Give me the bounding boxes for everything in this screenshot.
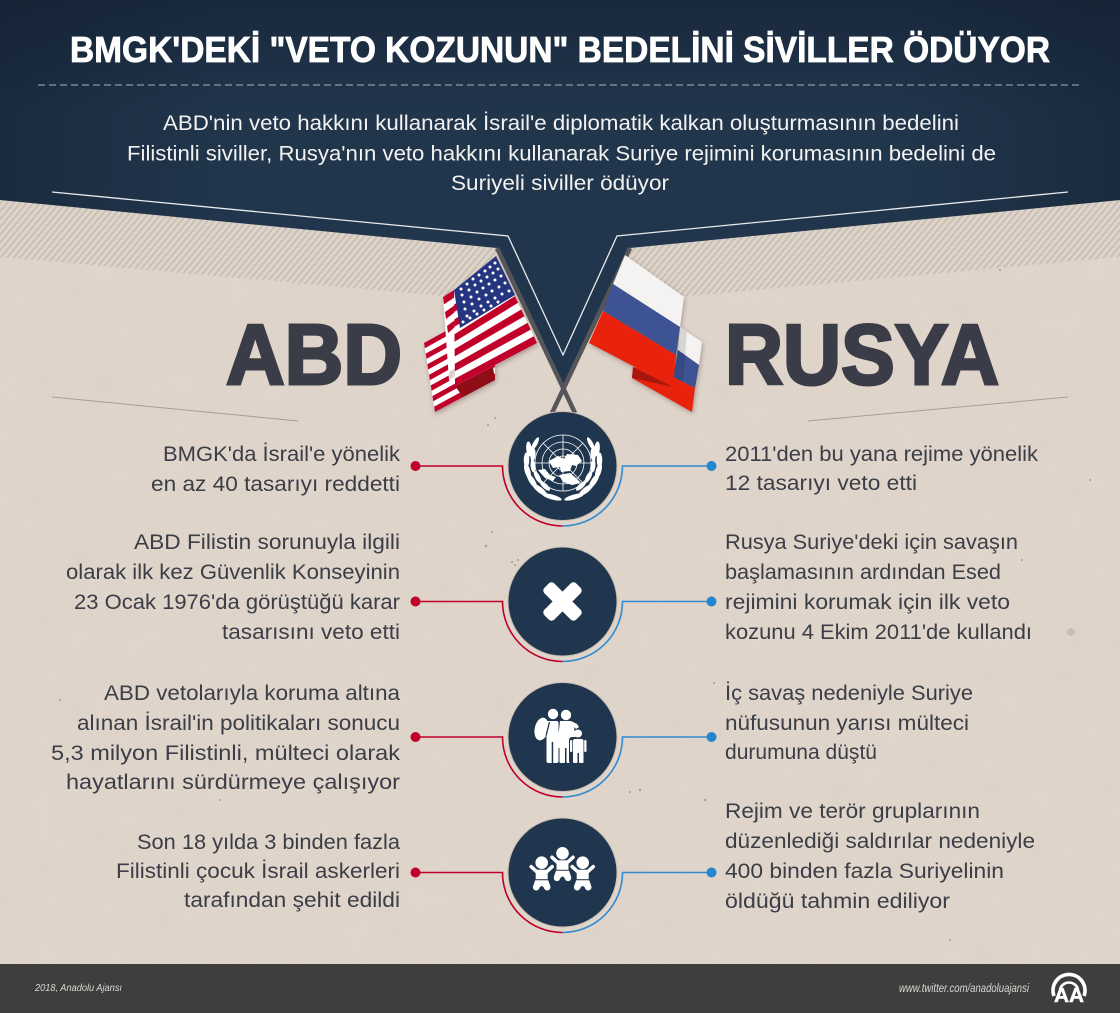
rear flag panel	[632, 327, 702, 412]
left text: Filistinli çocuk İsrail askerleri	[116, 859, 400, 883]
left text	[51, 681, 400, 794]
flag poles	[497, 248, 630, 413]
rear flag panel	[424, 304, 495, 412]
left text	[116, 830, 400, 912]
hatched band under header	[0, 200, 1120, 300]
left text: 5,3 milyon Filistinli, mülteci olarak	[51, 741, 400, 765]
row 1	[151, 412, 1038, 526]
copyright: 2018, Anadolu Ajansı	[34, 982, 122, 994]
icon: X mark	[542, 581, 583, 622]
right text: nüfusunun yarısı mülteci	[725, 711, 969, 735]
circle	[508, 818, 617, 927]
subtitle	[127, 111, 996, 195]
right text: 12 tasarıyı veto etti	[725, 471, 917, 495]
subtitle: Suriyeli siviller ödüyor	[451, 171, 669, 195]
left text: Son 18 yılda 3 binden fazla	[137, 830, 400, 854]
row 2	[66, 530, 1032, 662]
right text: rejimini korumak için ilk veto	[725, 590, 1010, 614]
logo: AA: AA	[1054, 985, 1084, 1007]
front flag	[454, 256, 537, 386]
subtitle: ABD'nin veto hakkını kullanarak İsrail'e diplomatik kalkan oluşturmasının bedelini	[163, 111, 959, 135]
right text	[725, 799, 1035, 913]
title: BMGK'DEKİ "VETO KOZUNUN" BEDELİNİ SİVİLLER ÖDÜYOR	[70, 29, 1050, 70]
right text: 400 binden fazla Suriyelinin	[725, 859, 1004, 883]
right text: kozunu 4 Ekim 2011'de kullandı	[725, 620, 1032, 644]
heading: ABD: ABD	[226, 308, 402, 403]
flag: Russia	[589, 255, 702, 412]
left text: en az 40 tasarıyı reddetti	[151, 472, 400, 496]
connector	[410, 596, 716, 662]
left text: hayatlarını sürdürmeye çalışıyor	[66, 770, 400, 794]
dashed divider	[38, 84, 1082, 86]
connector	[410, 461, 716, 526]
logo: AA	[1053, 974, 1085, 1007]
left text	[151, 442, 400, 496]
paper specks	[59, 269, 1091, 941]
icon: three babies	[531, 847, 593, 890]
left fold strip	[443, 290, 456, 384]
circle	[508, 412, 617, 520]
footer bar	[0, 964, 1120, 1013]
left text: BMGK'da İsrail'e yönelik	[163, 442, 400, 466]
right text: öldüğü tahmin ediliyor	[725, 889, 950, 913]
left text	[66, 530, 400, 644]
right text: Rejim ve terör gruplarının	[725, 799, 980, 823]
icon: refugee family	[532, 709, 588, 764]
left text: alınan İsrail'in politikaları sonucu	[77, 711, 400, 735]
white chevron outline	[52, 192, 1068, 355]
right text: düzenlediği saldırılar nedeniyle	[725, 829, 1035, 853]
row 3	[51, 681, 973, 797]
baby right	[572, 856, 593, 890]
row 4	[116, 799, 1035, 932]
left text: tarafından şehit edildi	[184, 888, 400, 912]
right text: 2011'den bu yana rejime yönelik	[725, 442, 1038, 466]
flag: USA	[424, 256, 537, 412]
heading: RUSYA: RUSYA	[725, 308, 999, 403]
circle	[508, 547, 617, 656]
fold	[632, 367, 673, 387]
left text: ABD Filistin sorunuyla ilgili	[134, 530, 400, 554]
left text: olarak ilk kez Güvenlik Konseyinin	[66, 560, 400, 584]
circle	[508, 682, 617, 792]
right text	[725, 681, 973, 764]
front flag	[589, 255, 684, 387]
fold	[455, 367, 495, 397]
left text: ABD vetolarıyla koruma altına	[104, 681, 400, 705]
right text	[725, 442, 1038, 495]
bag	[532, 716, 551, 742]
twitter address: www.twitter.com/anadoluajansi	[899, 983, 1029, 995]
connector	[410, 868, 716, 932]
baby centre	[552, 847, 573, 881]
heading underlines	[52, 397, 1068, 421]
right text: İç savaş nedeniyle Suriye	[725, 681, 973, 705]
left text: tasarısını veto etti	[222, 620, 400, 644]
right text: Rusya Suriye'deki için savaşın	[725, 530, 1018, 554]
right text: başlamasının ardından Esed	[725, 560, 1001, 584]
baby left	[531, 856, 552, 890]
icon: UN emblem	[523, 435, 603, 502]
right text	[725, 530, 1032, 644]
right text: durumuna düştü	[725, 740, 877, 764]
header banner	[0, 0, 1120, 385]
stars	[460, 262, 510, 324]
left text: 23 Ocak 1976'da görüştüğü karar	[74, 590, 400, 614]
subtitle: Filistinli siviller, Rusya'nın veto hakkını kullanarak Suriye rejimini korumasının bedelini de	[127, 142, 996, 166]
connector	[410, 732, 716, 797]
